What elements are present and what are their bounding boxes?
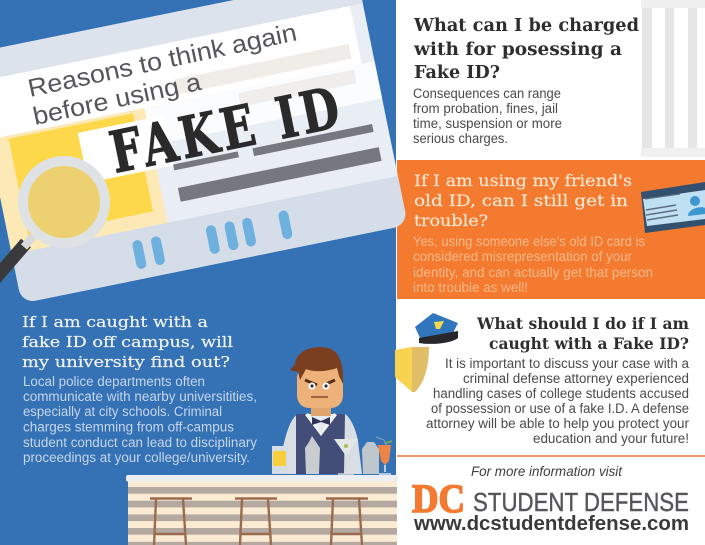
text: consequences: time, suspension or more	[413, 116, 562, 131]
text: website url: www.dcstudentdefense.com	[413, 513, 689, 535]
text: off campus answer: Local police departments often	[23, 374, 205, 389]
logo: DC Student Defense: DC	[412, 476, 465, 521]
heading: what can I be charged	[413, 16, 639, 83]
logo: DC Student Defense	[412, 476, 689, 521]
heading: caught off campus	[22, 315, 233, 371]
heading: what should I do: caught with a Fake ID?	[489, 334, 689, 353]
text: consequences: serious charges.	[413, 131, 508, 146]
panel: blue left background	[0, 0, 396, 545]
text: friend's ID answer	[413, 234, 653, 295]
heading: what should I do	[476, 314, 690, 353]
icon: large ID card	[0, 0, 408, 303]
text: what to do answer: handling cases of college students accused	[433, 386, 689, 401]
icon: police hat	[415, 313, 458, 344]
icon: cocktail shaker	[305, 436, 320, 474]
text: what to do answer	[426, 356, 689, 446]
text: off campus answer: student conduct can lead to disciplinary	[23, 435, 257, 450]
heading: friend's old ID	[414, 171, 632, 230]
title: reasons to think again before using a: Reasons to think again	[25, 19, 299, 103]
text: off campus answer: especially at city schools. Criminal	[23, 404, 222, 419]
heading: caught off campus: If I am caught with a	[22, 315, 208, 331]
text: for more information: For more information visit	[471, 463, 623, 479]
icon: jail bars	[641, 0, 705, 157]
text: friend's ID answer: identity, and can actually get that person	[413, 265, 653, 280]
text: what to do answer: attorney will be able to help you protect your	[426, 416, 689, 431]
text: off campus answer: proceedings at your college/university.	[23, 450, 250, 465]
title: FAKE ID: FAKE ID	[104, 75, 345, 187]
heading: friend's old ID: trouble?	[414, 211, 488, 230]
heading: what can I be charged: with for posessing a	[413, 40, 622, 60]
text: friend's ID answer: Yes, using someone else's old ID card is	[413, 234, 645, 249]
text: what to do answer: criminal defense attorney experienced	[463, 371, 689, 386]
text: what to do answer: education and your future!	[533, 431, 689, 446]
title: reasons to think again before using a	[25, 19, 299, 131]
text: off campus answer	[23, 374, 257, 465]
divider: orange line	[397, 455, 705, 457]
text: friend's ID answer: into trouble as well!	[413, 280, 528, 295]
icon: yellow drink glass	[272, 446, 287, 474]
icon: yellow shield	[395, 347, 429, 392]
icon: orange cocktail	[376, 437, 392, 474]
text: consequences	[413, 86, 562, 146]
heading: friend's old ID: old ID, can I still get in	[414, 191, 628, 210]
heading: what can I be charged: Fake ID?	[414, 63, 500, 83]
heading: what should I do: What should I do if I am	[476, 314, 690, 333]
text: off campus answer: communicate with nearby universitities,	[23, 389, 257, 404]
panel: bar counter with stools	[126, 475, 398, 545]
icon: magnifying glass	[0, 161, 105, 280]
text: off campus answer: charges stemming from off-campus	[23, 420, 234, 434]
text: what to do answer: It is important to discuss your case with a	[445, 356, 689, 371]
text: friend's ID answer: considered misrepresentation of your	[413, 249, 632, 264]
text: consequences: from probation, fines, jail	[413, 101, 558, 116]
heading: caught off campus: my university find out?	[22, 355, 230, 371]
heading: friend's old ID: If I am using my friend's	[414, 171, 632, 190]
icon: small ID card	[641, 182, 705, 233]
icon: martini glass	[334, 439, 358, 474]
title: reasons to think again before using a: before using a	[30, 68, 204, 131]
text: what to do answer: of possession or use of a fake I.D. A defense	[431, 401, 689, 416]
panel: orange section background	[397, 160, 705, 299]
icon: second shaker	[362, 442, 379, 474]
text: consequences: Consequences can range	[413, 86, 561, 101]
heading: caught off campus: fake ID off campus, will	[22, 335, 233, 351]
heading: what can I be charged: What can I be charged	[413, 16, 639, 36]
icon: bartender	[278, 347, 362, 474]
